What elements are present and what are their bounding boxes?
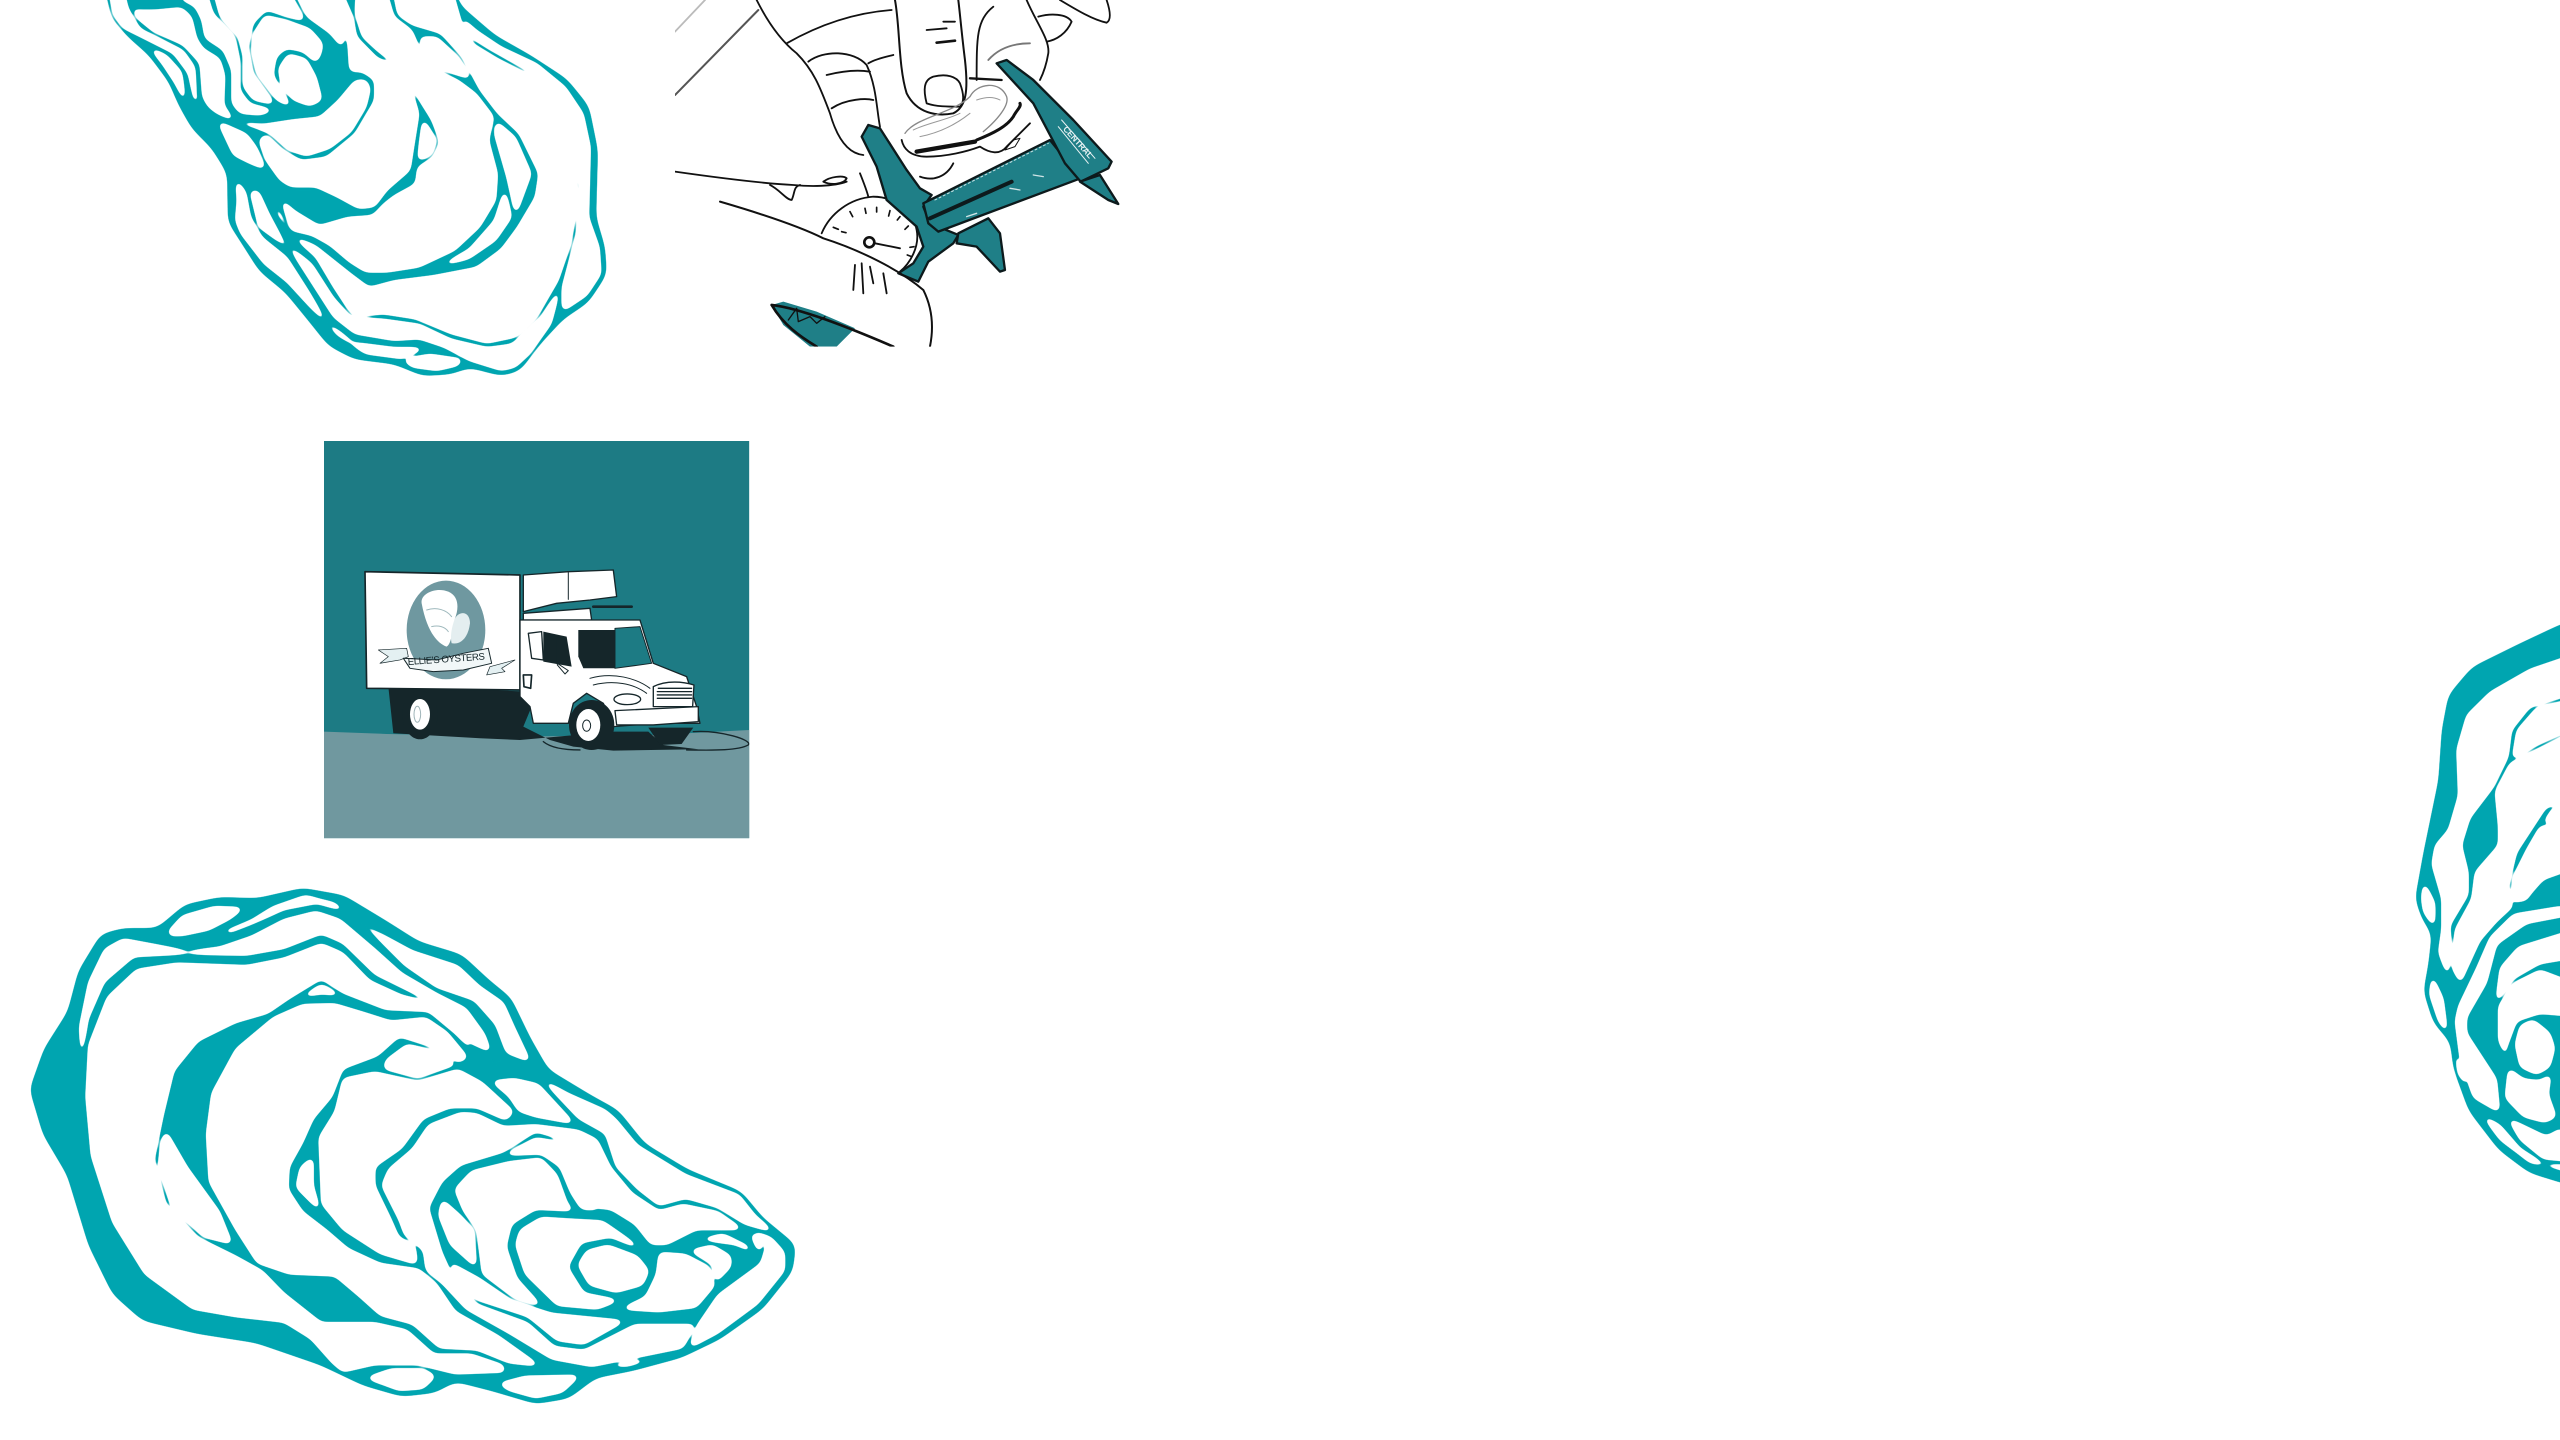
icon: oyster shell, top left, cropped by page top xyxy=(100,0,607,376)
grille xyxy=(653,682,694,707)
shell logo on the box xyxy=(407,581,485,679)
caliper body xyxy=(862,60,1118,282)
rear wheel xyxy=(409,699,430,740)
front wheel xyxy=(569,700,614,750)
caliper dial gauge xyxy=(822,197,917,272)
teal background xyxy=(324,441,749,838)
hand and fingers holding the oyster xyxy=(757,0,1110,155)
bumper xyxy=(615,707,698,725)
headlight xyxy=(614,694,641,705)
far front wheel xyxy=(648,728,693,745)
banner with name xyxy=(378,648,515,675)
ground loop line xyxy=(543,731,749,750)
icon: oyster shell, right edge, cropped by page edge xyxy=(2415,611,2560,1186)
caliper brand plate: CENTRAL xyxy=(1061,124,1095,160)
upper left lines xyxy=(675,0,758,95)
cab xyxy=(520,620,700,727)
door handle xyxy=(523,675,532,688)
illustration: hands measuring an oyster with calipers xyxy=(675,0,1118,347)
oyster being measured xyxy=(902,78,1030,179)
ground xyxy=(324,730,749,838)
roof fairing xyxy=(523,570,617,612)
truck shadow and chassis xyxy=(388,687,698,751)
illustration panel: Ellie's Oysters delivery truck xyxy=(324,441,749,838)
banner with name: ELLIE'S OYSTERS xyxy=(407,652,485,668)
windows xyxy=(528,627,652,674)
lower hand with painted thumbnail xyxy=(675,172,932,347)
icon: large oyster shell, bottom left xyxy=(29,888,796,1404)
cargo box xyxy=(365,572,520,690)
hood lines xyxy=(590,676,650,693)
